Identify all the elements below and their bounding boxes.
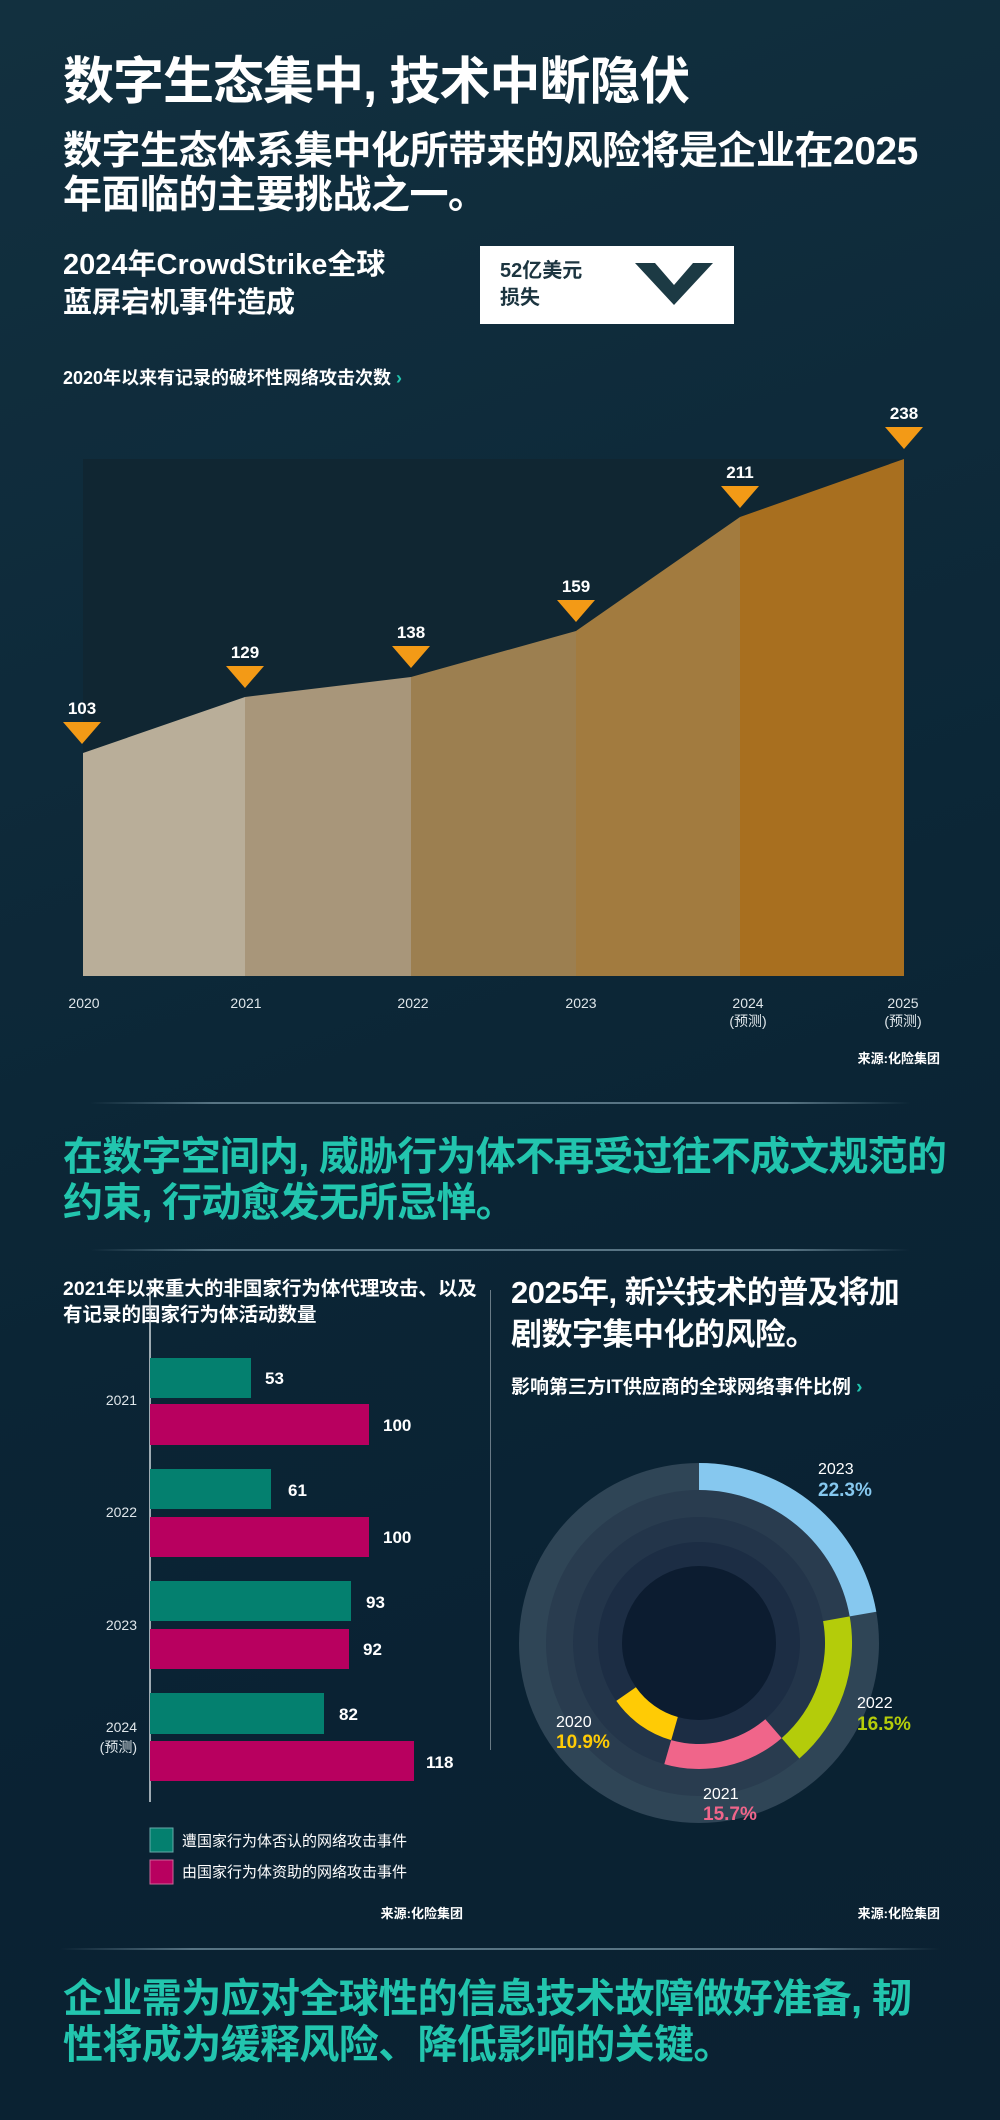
closing statement: 企业需为应对全球性的信息技术故障做好准备, 韧 — [63, 1977, 911, 2021]
donut subtitle: 影响第三方IT供应商的全球网络事件比例 › — [511, 1377, 862, 1398]
bar chart: 118 — [426, 1753, 453, 1772]
bar chart: 2022 — [106, 1504, 137, 1520]
area chart: (预测) — [884, 1013, 922, 1029]
legend: 遭国家行为体否认的网络攻击事件 — [182, 1833, 407, 1850]
area chart: 103 — [68, 699, 96, 718]
bar chart title: 2021年以来重大的非国家行为体代理攻击、以及 — [63, 1278, 477, 1300]
bar chart: (预测) — [100, 1739, 137, 1755]
area chart: (预测) — [729, 1013, 767, 1029]
donut title: 剧数字集中化的风险。 — [511, 1317, 816, 1352]
bar chart: 61 — [288, 1481, 307, 1500]
area chart: 138 — [397, 623, 425, 642]
donut chart: 10.9% — [556, 1732, 610, 1753]
donut title — [511, 1275, 899, 1352]
subtitle: 数字生态体系集中化所带来的风险将是企业在2025 — [63, 130, 918, 173]
area chart: 2025 — [887, 995, 919, 1011]
donut chart: 16.5% — [857, 1714, 911, 1735]
callout text: 损失 — [500, 287, 540, 309]
legend — [150, 1828, 407, 1884]
donut title: 2025年, 新兴技术的普及将加 — [511, 1275, 899, 1310]
callout text: 52亿美元 — [500, 260, 582, 282]
chart heading: 2020年以来有记录的破坏性网络攻击次数 › — [63, 368, 402, 388]
area chart: 2023 — [565, 995, 597, 1011]
icon: down chevron — [635, 263, 713, 305]
donut chart: 15.7% — [703, 1804, 757, 1825]
bar chart: 93 — [366, 1593, 385, 1612]
bar chart: 100 — [383, 1528, 411, 1547]
bar chart: 2023 — [106, 1617, 137, 1633]
crowdstrike text: 蓝屏宕机事件造成 — [63, 287, 295, 319]
title: 数字生态集中, 技术中断隐伏 — [63, 53, 689, 110]
teal statement: 在数字空间内, 威胁行为体不再受过往不成文规范的 — [63, 1135, 946, 1179]
donut chart: 22.3% — [818, 1480, 872, 1501]
closing statement — [63, 1977, 911, 2067]
crowdstrike text — [63, 248, 385, 319]
teal statement: 约束, 行动愈发无所忌惮。 — [63, 1181, 515, 1225]
source 2: 来源:化险集团 — [381, 1906, 463, 1921]
donut chart: 2022 — [857, 1695, 893, 1712]
area chart — [63, 404, 923, 1029]
bar chart title — [63, 1278, 477, 1326]
panel: bar chart — [63, 1278, 477, 1921]
area chart: 159 — [562, 577, 590, 596]
area chart: 2024 — [732, 995, 764, 1011]
area chart: 2020 — [68, 995, 100, 1011]
subtitle: 年面临的主要挑战之一。 — [63, 174, 487, 217]
closing statement: 性将成为缓释风险、降低影响的关键。 — [63, 2023, 733, 2067]
area chart: 2021 — [230, 995, 262, 1011]
bar chart title: 有记录的国家行为体活动数量 — [63, 1304, 317, 1326]
teal statement — [63, 1135, 946, 1225]
subtitle — [63, 130, 918, 217]
bar chart: 2024 — [106, 1719, 137, 1735]
donut chart: 2020 — [556, 1714, 592, 1731]
bar chart: 92 — [363, 1640, 382, 1659]
panel: donut chart — [511, 1275, 940, 1921]
source 1: 来源:化险集团 — [858, 1051, 940, 1066]
bar chart: 82 — [339, 1705, 358, 1724]
area chart: 211 — [726, 463, 754, 482]
area chart: 129 — [231, 643, 259, 662]
bar chart: 53 — [265, 1369, 284, 1388]
area chart: 2022 — [397, 995, 429, 1011]
crowdstrike text: 2024年CrowdStrike全球 — [63, 249, 385, 281]
bar chart: 100 — [383, 1416, 411, 1435]
area chart: 238 — [890, 404, 918, 423]
legend: 由国家行为体资助的网络攻击事件 — [182, 1864, 407, 1881]
source 3: 来源:化险集团 — [858, 1906, 940, 1921]
bar chart — [100, 1287, 453, 1884]
donut chart: 2023 — [818, 1461, 854, 1478]
callout box: loss — [480, 246, 734, 324]
bar chart: 2021 — [106, 1392, 137, 1408]
donut chart: 2021 — [703, 1786, 739, 1803]
donut chart — [519, 1461, 911, 1825]
callout text — [500, 260, 582, 309]
